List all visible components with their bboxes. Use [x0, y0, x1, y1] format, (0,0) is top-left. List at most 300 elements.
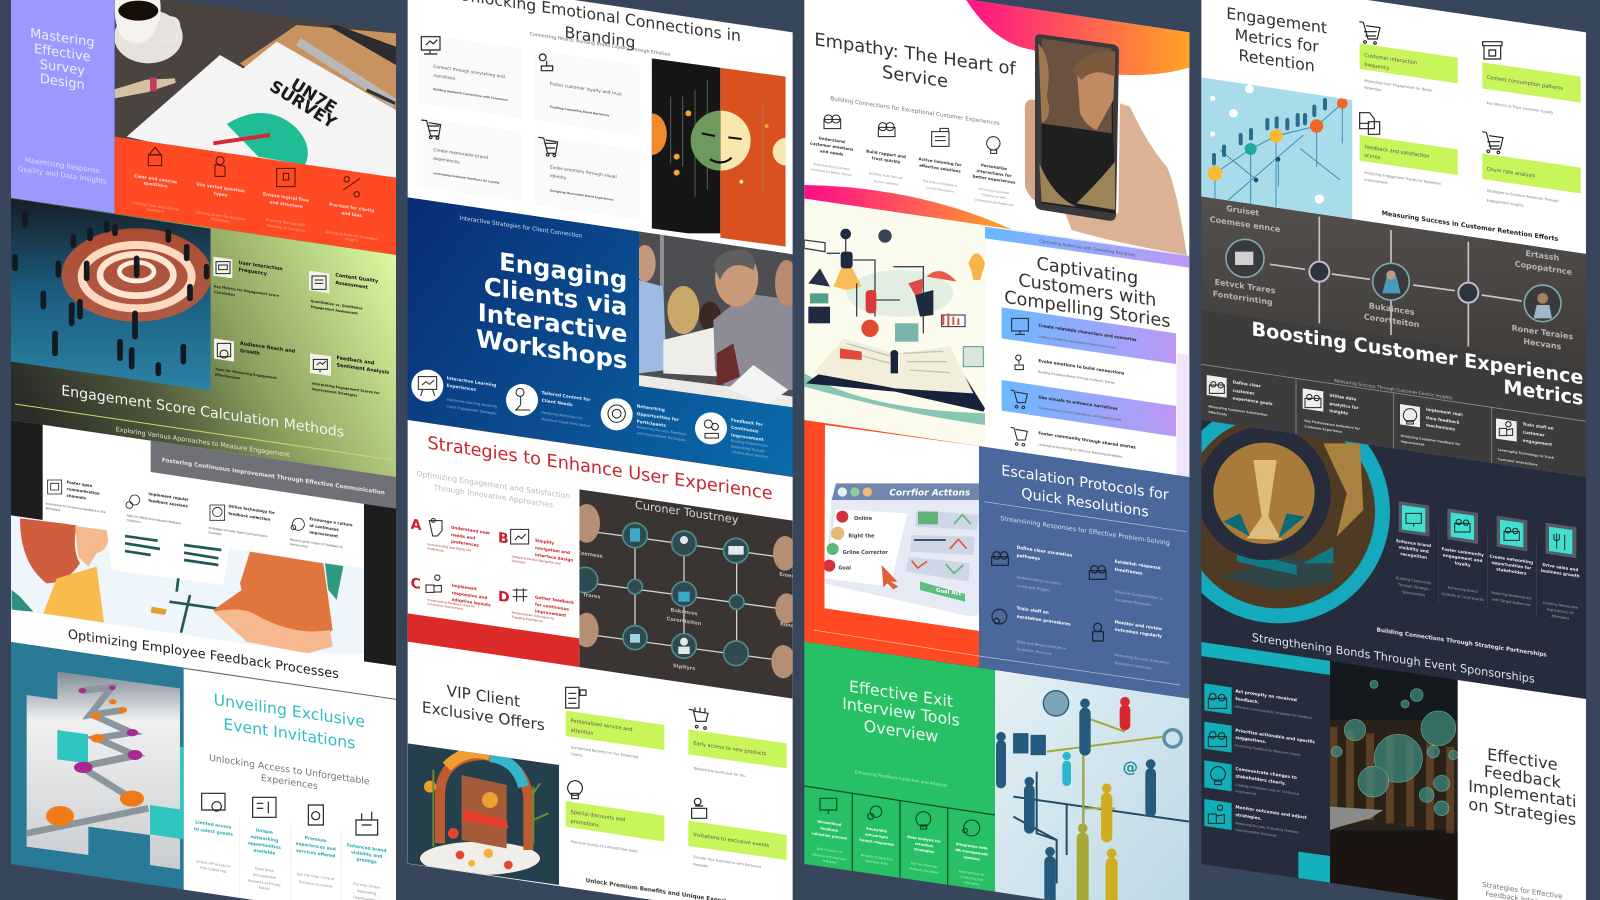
image: shop booth [408, 742, 559, 887]
group: four practices: channels [67, 493, 87, 501]
heading: slide title: Implementati [1468, 776, 1576, 811]
heading: slide title: Exclusive Offers [422, 698, 545, 734]
heading: slide title: Feedback [1484, 762, 1561, 792]
heading: slide title: Unveiling Exclusive [214, 690, 365, 731]
group: four protocols: Train staff on [1017, 605, 1049, 616]
text: subtitle: Unlocking Access to Unforgettable [209, 753, 370, 788]
group: four strategies A-D: Understanding User Needs and [427, 542, 471, 553]
group: four strategies A-D: Personalization Techniques for [512, 610, 555, 621]
image: two faced moods [652, 58, 786, 246]
group: four metric tips: engagement [1523, 438, 1552, 447]
group: four metrics: Engagement Insights [1487, 198, 1524, 208]
group: four workshop features: Client Engagement Strategies [447, 404, 497, 416]
group: four practices: Strategies to Foster Open Communication [208, 526, 268, 538]
group: four practices: Measuring the Impact of Feedback on [290, 537, 343, 549]
group: four protocols: outcomes regularly [1115, 627, 1162, 640]
group: four metric tips: customer [1233, 388, 1256, 396]
group: four metric tips: customer [1523, 429, 1546, 438]
illustration: corrective actions UI: Corrfior Acttons [889, 488, 971, 498]
heading: slide title: Retention [1239, 45, 1315, 76]
group: four metric tips: Customer Experience [1304, 424, 1342, 434]
panel: orange tips band [115, 137, 396, 255]
group: four sponsorship goals: Creating Memorable [1543, 601, 1578, 610]
heading: slide title: Design [40, 72, 85, 93]
group: four sponsorship goals: Through Strategic [1397, 583, 1429, 591]
group: four workshop features [411, 370, 769, 459]
group: four tools: Top Exit Interview [910, 861, 938, 869]
group: four metric tips: Leveraging Technology to Track [1498, 448, 1555, 460]
group: four metric tips: time feedback [1426, 415, 1460, 425]
group: four metric tips: analytics for [1329, 401, 1359, 410]
heading: slide title: Metrics [1503, 375, 1583, 410]
panel: Escalation Protocols for Quick Resolutions [804, 420, 1189, 699]
heading: slide title: Strategies to Enhance User Experience [427, 434, 773, 505]
group: four protocols: escalation procedures [1017, 614, 1071, 628]
panel: Unlocking Emotional Connections in Branding [408, 0, 801, 254]
group: four tools: systems [964, 855, 980, 862]
group: four cards [417, 33, 640, 220]
group: four sponsorship goals: Fostering Relationships [1491, 591, 1532, 601]
group: four sponsorship goals: visibility and [1399, 544, 1429, 554]
group: four workshop features: Interactive Learning [447, 375, 496, 389]
group: four strategies A-D: D [498, 589, 510, 606]
text: top banner: Fostering Continuous Improvement Through Effective Communication [162, 458, 385, 496]
group: four metric tips: Effectively [1208, 410, 1228, 417]
group: four tools: HR management [955, 848, 988, 857]
group: four methods: Growth [240, 348, 260, 357]
group: four empathy practices: Active Listening [874, 179, 898, 186]
heading: slide title [30, 26, 95, 93]
group: four metrics: Analyzing Engagement Trends for Retention [1364, 171, 1441, 186]
text: subtitle: Building Connections for Exceptional Customer Experiences [830, 96, 1000, 127]
group: four benefits: Unique [256, 827, 273, 836]
group: four protocols: Effective Communication in [1115, 590, 1163, 601]
group: story cards: Evoke emotions to build connections [1038, 358, 1125, 376]
panel: orange tips band: Pre-test for clarity [329, 202, 374, 214]
group: four benefits: networking [250, 834, 278, 844]
panel: orange tips band: Insights [345, 237, 359, 243]
group: four metrics: Churn rate analysis [1487, 166, 1535, 180]
image: hand holding phone [1025, 34, 1187, 255]
panel: orange tips band: Use varied question [196, 181, 245, 195]
group: four workshop features: and Improvement Techniques [637, 431, 686, 442]
photo: target crowd [11, 197, 212, 397]
group: four methods: Content Quality [335, 272, 379, 285]
photo: customer journey board: Stpltyrs [673, 663, 695, 672]
group: four cards: experiences [433, 156, 460, 166]
group: four workshop features: Experiences [447, 383, 477, 393]
group: four sponsorship goals: Building Community [1396, 576, 1431, 585]
panel: Engaging Clients via Interactive Workshops [408, 197, 798, 476]
photo: journey board: Coemese ennce [1210, 215, 1281, 234]
text: kicker: Interactive Strategies for Client Connection [460, 216, 583, 240]
photo: journey board: Gruiset [1226, 204, 1259, 218]
photo: journey board: Hecvans [1523, 337, 1561, 351]
group: four methods: Improvement Strategies [312, 387, 357, 398]
heading: slide title: Mastering [30, 26, 95, 51]
group: four metric tips: Improvement [1401, 439, 1425, 447]
group: four tools: Software [823, 859, 836, 865]
panel: orange tips band: Questions [147, 207, 165, 214]
group: four feedback actions: Monitor outcomes and adjust [1235, 804, 1307, 821]
group: four metrics: Strategies to Enhance Retention Through [1487, 189, 1559, 203]
group: four strategies A-D: interface design [535, 552, 573, 563]
group: four feedback actions: Act promptly on received [1235, 688, 1297, 703]
group: four benefits: Elite Gatherings [200, 866, 227, 874]
group: four tools: honest responses [859, 838, 894, 847]
photo: customer journey board: Coemese [577, 550, 603, 560]
group: four offers: Personalized service and [571, 718, 633, 733]
text: subtitle: Maximizing Response [25, 155, 100, 175]
group: four benefits: Discover Unique [353, 882, 380, 890]
heading: slide title: Engagement [1226, 4, 1327, 37]
group: four workshop features: Tailored Content for [542, 390, 591, 403]
group: four protocols: pathways [1017, 553, 1040, 562]
group: four sponsorship goals: Experiences for [1547, 607, 1574, 615]
group: four practices [46, 479, 353, 549]
group: four offers: Early access to new products [693, 741, 767, 757]
panel: Mastering Effective Survey Design [11, 0, 398, 255]
group: four metric tips: Train staff on [1523, 421, 1554, 431]
group: four strategies A-D: adaptive layouts [452, 597, 491, 608]
group: four empathy practices: Active listening for [919, 156, 961, 168]
group: four benefits: Premium [305, 835, 327, 844]
group: four benefits: Experience [255, 866, 274, 873]
group: four practices: feedback sessions [148, 498, 188, 509]
group: four practices: feedback collection [228, 511, 270, 522]
heading: slide title: VIP Client [447, 682, 520, 711]
group: four tools: Integration with [956, 842, 988, 851]
group: four benefits: Events [259, 886, 270, 891]
chart image: rising network [1201, 75, 1353, 222]
group: four workshop features: Participants [637, 419, 666, 429]
heading: slide title: Escalation Protocols for [1001, 463, 1169, 504]
heading: slide title [422, 682, 545, 734]
panel: Engagement Score Calculation Methods [11, 197, 396, 477]
panel: Strategies to Enhance User Experience [408, 420, 798, 700]
group: four empathy practices: Enhancing Customer [978, 187, 1010, 195]
panel: orange tips band: Diversity in Sampling [267, 224, 305, 233]
group: four strategies A-D: Engaging Experiences [512, 615, 543, 623]
heading: slide title: Compelling Stories [1004, 288, 1170, 332]
group: four strategies A-D: C [411, 575, 421, 593]
group: four cards: narratives [433, 73, 456, 82]
group: four empathy practices: better experiences [973, 174, 1016, 185]
group: four empathy practices: Conflict Resolution [926, 186, 954, 194]
group: four metric tips: mechanisms [1426, 422, 1456, 432]
illustration: corrective actions UI: Grline Corrector [843, 550, 888, 556]
group: four tools: Data analysis for [907, 835, 941, 844]
group: four tools: Conducting Exit [960, 875, 984, 882]
heading: slide title: Quick Resolutions [1021, 486, 1149, 521]
group: four methods: Key Metrics for Engagement Score [214, 284, 280, 298]
panel: orange tips band: Responses [211, 217, 230, 224]
group: four benefits: Join the Inner Circle of [296, 872, 335, 882]
panel: orange tips band: and bias [341, 210, 362, 219]
heading: slide title: Survey [40, 57, 85, 79]
group: four sponsorship goals: Sponsorships [1402, 590, 1425, 597]
group: four protocols [992, 545, 1169, 670]
heading: slide title: Interview Tools [842, 694, 960, 730]
group: four methods: Interpreting Engagement Scores for [312, 381, 380, 395]
illustration: open book with ideas [804, 197, 986, 450]
heading: slide title: Strengthening Bonds Through Event Sponsorships [1252, 630, 1535, 686]
group: four benefits: Enhanced brand [347, 842, 386, 854]
heading: slide title: Overview [864, 716, 938, 746]
group: four tools: Anonymity [866, 826, 888, 834]
group: four empathy practices: trust quickly [872, 155, 901, 164]
group: four workshop features: Networking [637, 403, 665, 413]
decoration: gradient waves [804, 0, 1192, 230]
group: four methods: Engagement Assessment [311, 305, 358, 316]
group: four protocols: Define clear escalation [1017, 545, 1072, 559]
group: four practices: Utilize technology for [228, 503, 275, 515]
group: four benefits [194, 793, 386, 900]
group: four metric tips: Measuring Customer Satisfaction [1208, 404, 1268, 417]
group: four offers: Elevate Your Experience with Exclusive [693, 855, 761, 869]
group: four protocols: Resolution Outcomes [1115, 661, 1152, 670]
group: four tools: Best Practices for [959, 869, 985, 877]
group: four tools: Effective Exit Interview [812, 852, 847, 862]
group: four offers [566, 687, 787, 869]
photo: journey board: Corortteiton [1364, 312, 1420, 329]
group: four feedback actions: suggestions. [1235, 735, 1267, 745]
photo: customer journey board: Bukances [671, 607, 697, 617]
group: four metrics: Content consumption patterns [1487, 75, 1563, 92]
photo: ring-framed glassware [1201, 422, 1390, 624]
group: four benefits: Networking [357, 889, 376, 896]
group: four workshop features: Measuring Success: Feedback [637, 425, 686, 436]
group: four workshop features: Opportunities for [637, 411, 680, 423]
photo: zigzag path with pills [27, 672, 184, 869]
heading: slide title: Effective [1487, 745, 1558, 774]
photo: journey board: Copopatrnce [1515, 259, 1573, 277]
group: four benefits: experiences and [296, 841, 336, 853]
photo: customer journey board: Emer [779, 572, 794, 580]
group: four tools: encourages [865, 832, 888, 840]
group: four empathy practices: Compassionate Responses [974, 197, 1014, 207]
group: four offers: Clients [571, 752, 583, 758]
heading: slide title [476, 247, 627, 375]
group: four strategies A-D: Continuous Improvement [427, 602, 464, 611]
illustration: corrective actions UI: Online [854, 516, 873, 522]
group: four cards: Leveraging Customer Emotions for Loyalty [433, 171, 500, 185]
group: four methods: Feedback and [337, 355, 375, 367]
group: four sponsorship goals: Foster community [1442, 546, 1484, 557]
group: story cards: Create relatable characters and scenarios [1038, 323, 1137, 342]
group: four practices: Encourage a culture [309, 516, 353, 527]
heading: slide title: Clients via [484, 272, 627, 322]
group: four empathy practices: Understand [819, 135, 845, 144]
group: four protocols: Understanding Escalation [1017, 575, 1061, 586]
group: four benefits: opportunities [248, 840, 281, 851]
group: four strategies A-D: Implementing Feedback Loops for [427, 598, 476, 609]
group: four practices: Foster open [67, 479, 93, 488]
heading: slide title [1226, 4, 1327, 76]
group: four metric tips: insights [1329, 408, 1348, 416]
group: four feedback actions: feedback. [1235, 696, 1260, 706]
group: four workshop features: Feedback for [731, 417, 764, 428]
photo: survey clipboard on desk [114, 0, 398, 190]
heading: slide title: Event Invitations [223, 714, 355, 753]
text: subtitle: Streamlining Responses for Effective Problem-Solving [1000, 515, 1170, 547]
photo: journey board: Roner Teraies [1512, 323, 1573, 342]
group: four metrics: Key Metrics to Track Customer Loyalty [1487, 101, 1553, 115]
photo: journey board: Fontorrinting [1213, 289, 1273, 307]
group: four tools: feedback [820, 826, 839, 833]
group: four metric tips: Define clear [1233, 379, 1262, 389]
group: four strategies A-D: Understand user [451, 525, 491, 536]
group: four cards: Foster customer loyalty and trust [550, 81, 622, 98]
group: four methods: Audience Reach and [240, 341, 296, 355]
heading: slide title: Captivating [1036, 254, 1138, 289]
panel: orange tips band: Ensure logical flow [263, 191, 309, 204]
group: story cards: Foster community through shared stories [1038, 430, 1136, 450]
group: four empathy practices: Build rapport and [866, 148, 906, 159]
text: tagline: Measuring Success in Customer Retention Efforts [1382, 210, 1558, 243]
group: four methods: Assessment [335, 280, 368, 291]
photo: journey board: Bukainces [1369, 301, 1415, 317]
group: four practices: improvement [309, 529, 338, 539]
group: four tools: collection process [812, 831, 847, 841]
group: four feedback actions: Communicate changes to [1235, 766, 1297, 781]
group: four sponsorship goals: stakeholders [1496, 566, 1527, 576]
group: four cards: Designing Memorable Brand Experiences [550, 188, 614, 202]
group: four strategies A-D: Preferences [427, 546, 444, 553]
group: four offers: Special discounts and [571, 809, 625, 823]
group: four protocols: Establish response [1115, 559, 1161, 571]
heading: slide title: Boosting Customer Experience [1252, 317, 1583, 389]
heading: slide title: Interactive [478, 298, 627, 349]
group: four sponsorship goals: Attendees [1551, 614, 1569, 621]
group: four metrics: Feedback and satisfaction [1364, 144, 1429, 160]
group: four benefits: Moments at Private [248, 879, 281, 887]
group: four offers: Unmatched Benefits for Our Esteemed [571, 745, 638, 759]
heading: slide title: Empathy: The Heart of [814, 29, 1016, 80]
group: four practices: Workplace [46, 506, 61, 512]
group: four benefits: available [253, 847, 275, 857]
group: four tools: Streamlined [817, 820, 842, 827]
heading: slide title [1468, 745, 1576, 829]
group: four strategies A-D: for continuous [535, 602, 570, 612]
group: story cards: Leveraging Storytelling for Effective Marketing Strategies [1038, 442, 1123, 459]
group: four practices: Channels [208, 530, 222, 536]
text: subtitle: Strategies for Effective [1482, 880, 1562, 900]
group: four empathy practices: interactions for [977, 168, 1011, 178]
panel: orange tips band: Ensuring Demographic [266, 218, 306, 228]
heading: slide title [842, 677, 960, 746]
text: tagline: Building Connections Through Strategic Partnerships [1377, 627, 1547, 659]
panel: Boosting Customer Experience Metrics [1201, 195, 1586, 476]
group: four practices: communication [67, 486, 100, 496]
group: story cards: Transforming Customer Experiences with Engaging Tales [1037, 406, 1122, 422]
group: four benefits: Exclusive Occasions [299, 880, 333, 889]
group: four methods [213, 257, 389, 398]
group: four methods: Sentiment Analysis [337, 362, 389, 376]
group: four strategies A-D: Designing Intuitive Navigation and [512, 554, 561, 566]
group: story cards [1002, 307, 1189, 478]
group: story cards: Building Emotional Bonds Through Authentic Stories [1038, 370, 1115, 385]
illustration: corrective actions UI [823, 423, 979, 631]
heading: slide title: Metrics for [1235, 25, 1319, 56]
heading: slide title: Optimizing Employee Feedback Processes [68, 627, 339, 682]
group: four tools: Interviews [964, 880, 980, 887]
panel: Effective Exit Interview Tools Overview [804, 642, 1190, 900]
group: four sponsorship goals: Enhancing Brand [1448, 585, 1478, 594]
group: four strategies A-D: preferences [451, 539, 480, 548]
banner: kicker strip [985, 227, 1189, 268]
group: four metrics: frequency [1364, 62, 1389, 72]
group: four metric tips: Key Performance Indicators for [1304, 419, 1360, 431]
photo: customer journey board [572, 487, 798, 700]
image: network of people: @ [1123, 759, 1138, 777]
group: four empathy practices: Building Trust Through [869, 171, 903, 180]
illustration: corrective actions UI: Right the [848, 533, 875, 539]
group: four workshop features: Designing Workshops for [541, 410, 583, 421]
group: four feedback actions: Implementation Outcomes [1235, 828, 1277, 838]
group: four protocols: timeframes [1115, 567, 1143, 577]
group: four feedback actions: Improvement [1235, 789, 1257, 796]
group: four benefits: visibility and [351, 849, 382, 860]
group: four cards: Create memorable brand [433, 147, 488, 161]
heading: slide title [1004, 254, 1170, 332]
group: four metrics [1359, 22, 1581, 208]
photo: journey board [1202, 196, 1586, 350]
panel: orange tips band: and structure [269, 199, 303, 210]
group: four tools [804, 786, 995, 887]
group: four protocols: Escalation Processes [1115, 598, 1151, 607]
group: four strategies A-D: Interfaces [512, 559, 526, 565]
panel: orange tips band: Utilizing Scales for Accurate [196, 210, 245, 222]
panel: VIP Client Exclusive Offers [408, 642, 793, 900]
group: four methods: Calculation [214, 290, 236, 297]
group: four strategies A-D: responsive and [452, 590, 487, 600]
group: four strategies A-D: Simplify [535, 538, 554, 546]
group: four methods: Quantitative vs. Qualitative [311, 299, 363, 311]
group: four tools: Interview Tools [866, 859, 888, 866]
group: four sponsorship goals: opportunities for [1491, 560, 1532, 571]
group: four feedback actions: Effective Communication Strategies for Feedback [1235, 705, 1312, 720]
heading: slide title: Workshops [476, 324, 627, 375]
group: four strategies A-D: needs and [451, 532, 475, 541]
group: four cards: Connect through storytelling and [433, 64, 505, 80]
group: four strategies A-D: navigation and [535, 545, 570, 555]
group: four benefits: Limited access [195, 819, 232, 831]
group: four empathy practices: Personalize [981, 162, 1007, 171]
group: four feedback actions: Prioritizing Feedback for Maximum Impact [1235, 743, 1301, 757]
group: four tools: retention [915, 842, 934, 848]
heading: slide title: Effective [34, 42, 91, 65]
heading: slide title: Customers with [1018, 271, 1156, 311]
group: four benefits: to select guests [194, 826, 233, 838]
group: four cards: Evoke emotions through visual [550, 164, 617, 180]
group: four protocols: Escalation Protocols [1017, 647, 1052, 656]
illustration: corrective actions UI: Goal Act [936, 588, 962, 597]
group: four feedback actions: stakeholders clearly. [1235, 773, 1286, 787]
group: four protocols: Monitor and review [1115, 619, 1162, 632]
group: four cards: Enabling Compelling Brand Narratives [550, 105, 610, 117]
panel: Captivating Customers with Compelling Stories [804, 197, 1189, 478]
group: four strategies A-D: B [498, 530, 509, 548]
group: four empathy practices: The Role of Empathy in [922, 179, 957, 188]
text: subtitle: Experiences [261, 773, 318, 792]
group: four offers: promotions [571, 819, 599, 829]
group: four practices: Importance of Continuous Feedback in the [46, 501, 106, 514]
group: four strategies A-D [411, 517, 574, 623]
panel: Optimizing Employee Feedback Processes [11, 420, 396, 699]
group: four metrics: scores [1364, 153, 1381, 161]
group: four workshop features: Collaborative Sessions [731, 450, 769, 459]
